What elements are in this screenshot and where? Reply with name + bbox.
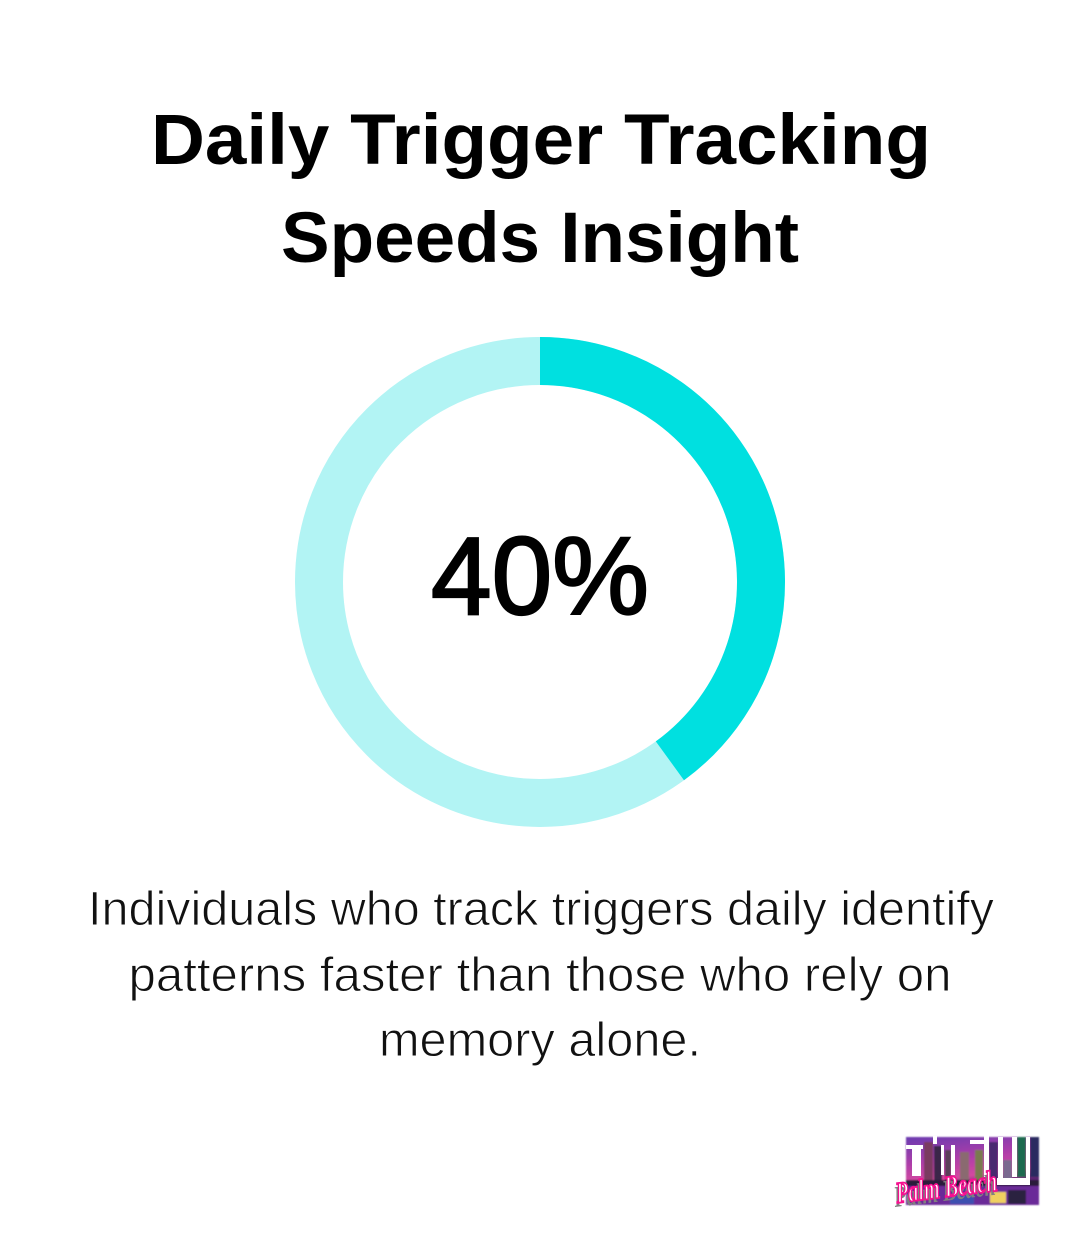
logo script text	[891, 1165, 999, 1214]
logo white letterforms	[906, 1131, 1030, 1185]
description text: patterns faster than those who rely on	[128, 949, 951, 1002]
title: Daily Trigger Tracking	[151, 101, 931, 180]
description text: memory alone.	[379, 1014, 701, 1067]
title	[151, 101, 931, 278]
description text	[88, 883, 994, 1067]
logo skyline panel	[906, 1137, 1039, 1205]
logo script text: Palm Beach	[891, 1169, 997, 1214]
logo: Amitry Palm Beach	[891, 1131, 1039, 1214]
description text: Individuals who track triggers daily identify	[88, 883, 994, 936]
center percentage: 40%	[431, 515, 649, 638]
donut value arc	[540, 361, 761, 761]
donut track	[319, 361, 761, 803]
title: Speeds Insight	[281, 199, 799, 278]
logo script text: Palm Beach	[893, 1165, 999, 1210]
donut chart: 40%	[319, 361, 761, 803]
